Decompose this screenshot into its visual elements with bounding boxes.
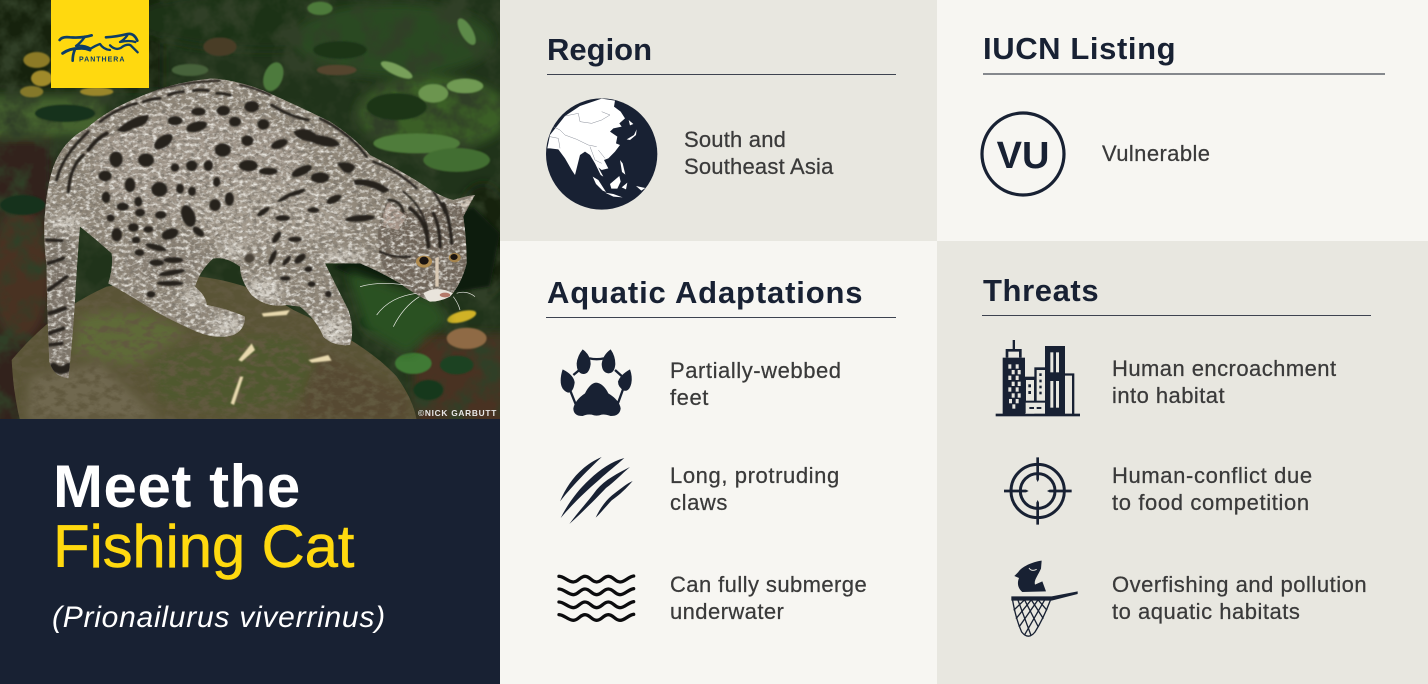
logo wordmark: PANTHERA bbox=[79, 57, 125, 64]
panel: title block bbox=[0, 419, 500, 684]
text: webbed feet bbox=[670, 358, 842, 410]
text: conflict: Human-conflict due bbox=[1112, 463, 1313, 488]
text: encroachment bbox=[1112, 356, 1337, 408]
icon: city bbox=[996, 340, 1080, 416]
photo credit: ©NICK GARBUTT bbox=[418, 408, 497, 418]
panel: IUCN listing bbox=[980, 31, 1385, 197]
heading: threats: Threats bbox=[983, 273, 1099, 308]
icon: VU badge bbox=[980, 111, 1066, 197]
cat body bbox=[0, 0, 500, 420]
panel: region background bbox=[500, 0, 937, 241]
logo: Panthera bbox=[51, 0, 149, 88]
text: claws: claws bbox=[670, 490, 728, 514]
text: region: Southeast Asia bbox=[684, 154, 834, 178]
panel: threats background bbox=[937, 241, 1428, 684]
text: vulnerable: Vulnerable bbox=[1102, 141, 1210, 166]
icon: fish and net bbox=[1011, 560, 1078, 637]
icon: paw bbox=[454, 292, 632, 416]
text: overfishing: to aquatic habitats bbox=[1112, 598, 1300, 624]
heading: region: Region bbox=[547, 32, 652, 67]
icon: crosshair bbox=[1004, 457, 1072, 525]
panel: threats bbox=[982, 273, 1371, 637]
icon: globe bbox=[546, 98, 658, 210]
icon: VU badge: VU bbox=[997, 135, 1049, 177]
spots and stripes bbox=[47, 81, 452, 370]
title line 1: Meet the bbox=[53, 453, 301, 520]
text: region bbox=[684, 127, 834, 178]
face details bbox=[435, 257, 439, 287]
text: webbed feet: feet bbox=[670, 384, 709, 410]
icon: claw marks bbox=[560, 457, 632, 524]
text: submerge: underwater bbox=[670, 598, 784, 624]
text: webbed feet: Partially-webbed bbox=[670, 358, 842, 383]
panel: region bbox=[546, 32, 896, 210]
photo: fishing cat on a log bbox=[0, 0, 636, 618]
text: submerge: Can fully submerge bbox=[670, 572, 867, 597]
mottled foliage shadow bbox=[0, 0, 500, 420]
heading: aquatic adaptations: Aquatic Adaptations bbox=[547, 275, 863, 310]
scientific name: (Prionailurus viverrinus) bbox=[52, 601, 386, 634]
panel: aquatic adaptations bbox=[336, 266, 896, 624]
text: overfishing: Overfishing and pollution bbox=[1112, 572, 1367, 597]
log bbox=[12, 277, 417, 420]
text: region: South and bbox=[684, 127, 786, 152]
dark shadow and ferns under head bbox=[333, 207, 500, 293]
text: claws: Long, protruding bbox=[670, 463, 840, 488]
text: claws bbox=[670, 463, 840, 514]
whiskers bbox=[360, 283, 475, 327]
fur texture bbox=[44, 78, 474, 373]
text: overfishing bbox=[1112, 572, 1367, 624]
text: encroachment: into habitat bbox=[1112, 382, 1225, 408]
head bbox=[378, 195, 475, 302]
text: encroachment: Human encroachment bbox=[1112, 356, 1337, 381]
text: submerge bbox=[670, 572, 867, 624]
icon: waves bbox=[557, 574, 636, 622]
icon: leaping cats mark bbox=[58, 32, 139, 64]
text: conflict: to food competition bbox=[1112, 490, 1310, 514]
title line 2: Fishing Cat bbox=[53, 513, 354, 580]
heading: IUCN listing: IUCN Listing bbox=[983, 31, 1176, 66]
text: conflict bbox=[1112, 463, 1313, 515]
